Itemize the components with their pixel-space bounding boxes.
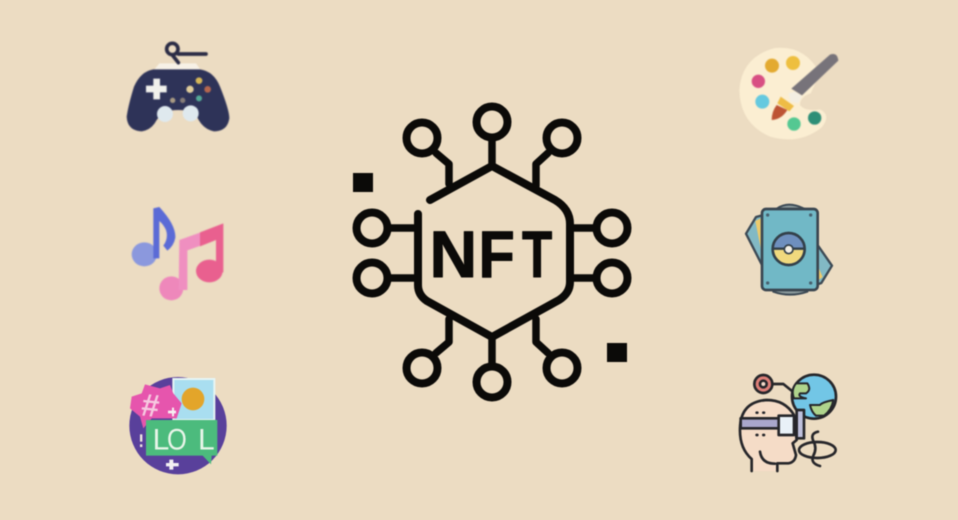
hexagon outline <box>418 166 570 337</box>
NFT label: N <box>430 217 477 291</box>
icon: music notes <box>132 207 223 300</box>
icon: trading cards <box>746 205 832 295</box>
icon: game controller <box>127 43 229 131</box>
square accent right <box>607 343 627 362</box>
central NFT circuit icon <box>353 106 628 398</box>
square accent left <box>353 173 373 192</box>
circuit nodes <box>356 106 628 398</box>
NFT label: T <box>522 218 552 292</box>
LOL label: L <box>153 424 169 457</box>
icon: artist palette <box>739 48 838 139</box>
hash symbol: # <box>140 387 161 424</box>
icon: virtual reality headset <box>740 375 836 471</box>
LOL label <box>153 423 215 457</box>
circuit connectors <box>391 140 593 364</box>
NFT label <box>430 217 552 292</box>
NFT label: F <box>478 218 515 292</box>
LOL label: L <box>198 424 215 457</box>
LOL label: O <box>167 423 187 456</box>
icon: social media LOL <box>129 377 227 474</box>
